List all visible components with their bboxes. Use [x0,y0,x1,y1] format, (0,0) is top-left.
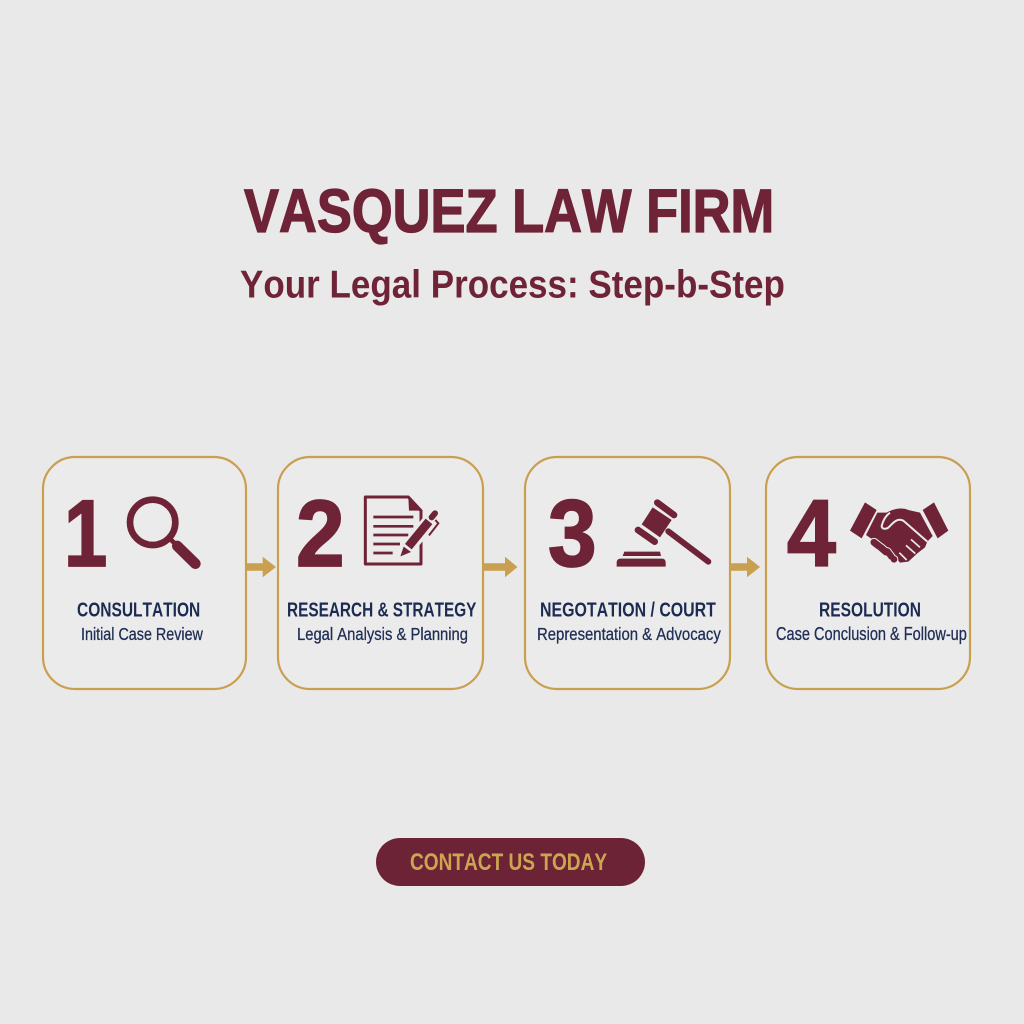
button: contact us today: CONTACT US TODAY [410,848,608,876]
heading: negotation / court: NEGOTATION / COURT [540,599,716,621]
button: contact us today [376,838,645,886]
text: case conclusion and follow-up: Case Conclusion & Follow-up [776,625,967,644]
panel: step 1 consultation [43,457,246,689]
arrow: step 3 to 4 [730,557,760,577]
text: initial case review: Initial Case Review [81,625,203,644]
number 3: 3 [548,481,597,587]
panel: step 2 research and strategy [278,457,483,689]
heading: research and strategy: RESEARCH & STRATEGY [287,599,477,621]
subtitle: Your Legal Process: Step-b-Step [240,263,785,306]
icon: gavel [617,503,708,567]
icon: handshake [850,502,948,564]
panel: step 4 resolution [766,457,970,689]
heading: consultation: CONSULTATION [77,599,200,621]
panel: step 3 negotiation or court [525,457,730,689]
icon: magnifying glass [130,500,195,564]
title: VASQUEZ LAW FIRM [244,177,774,246]
number 2: 2 [296,481,345,587]
number 1: 1 [64,481,107,587]
heading: resolution: RESOLUTION [819,599,921,621]
icon: document with pen [365,497,438,564]
number 4: 4 [787,481,836,587]
text: legal analysis and planning: Legal Analysis & Planning [297,625,468,644]
arrow: step 2 to 3 [484,557,518,577]
text: representation and advocacy: Representation & Advocacy [537,624,721,644]
arrow: step 1 to 2 [246,557,276,577]
